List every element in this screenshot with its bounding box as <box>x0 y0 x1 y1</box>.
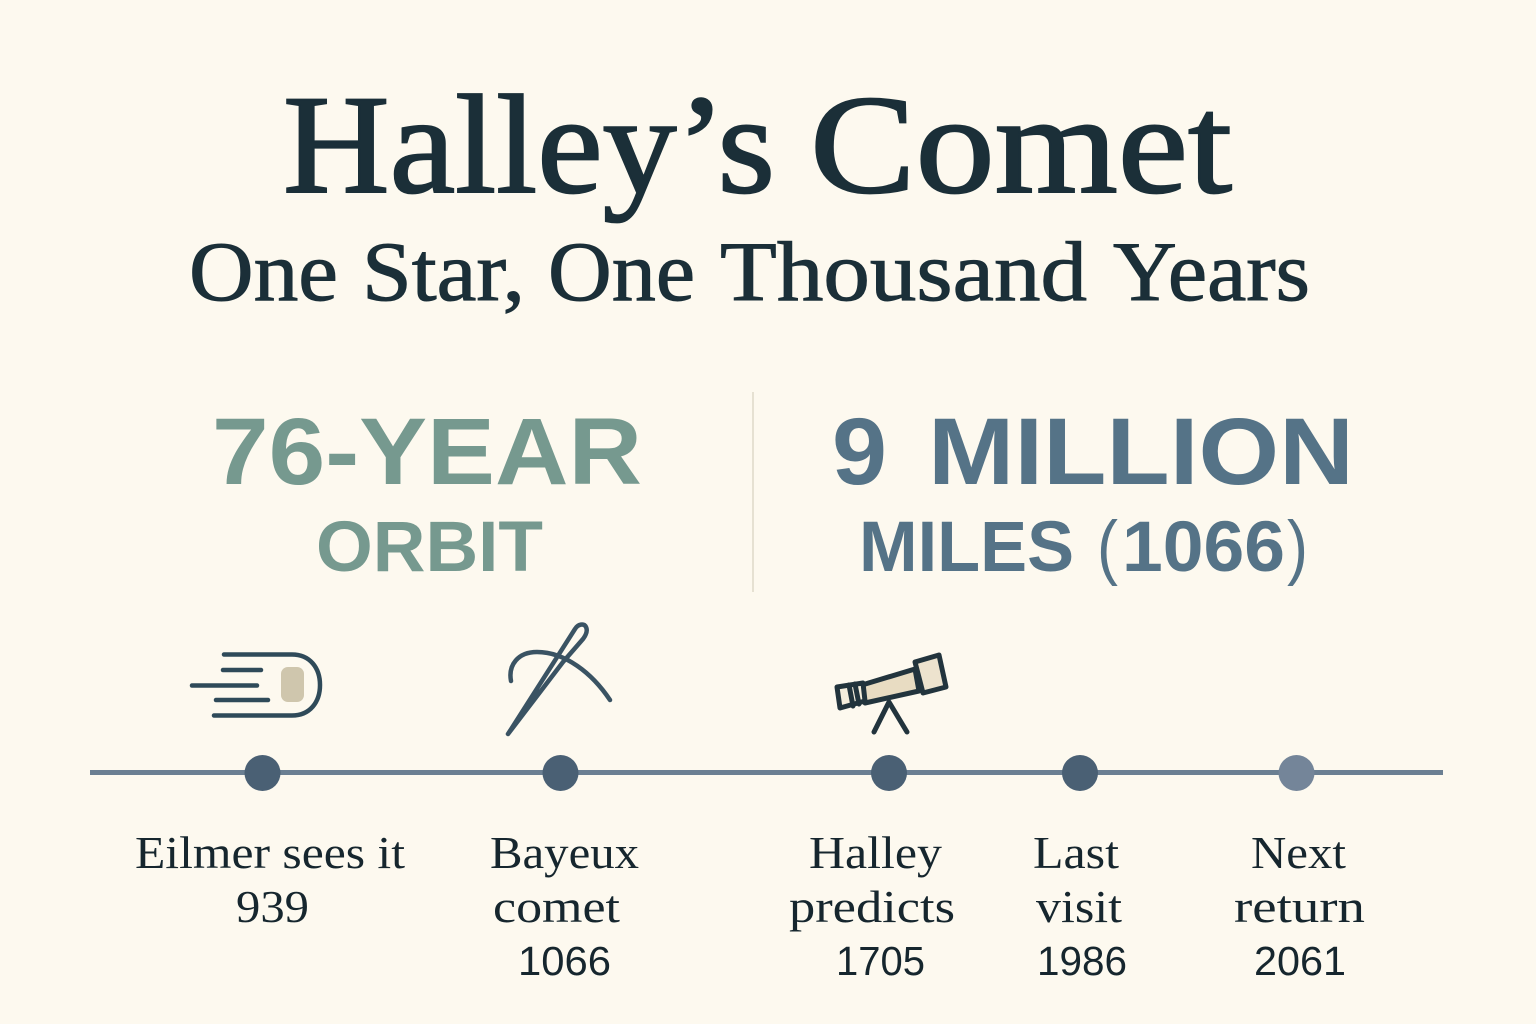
stat: 9 million miles: ( <box>1097 508 1118 587</box>
label: Bayeux comet 1066: Bayeux <box>490 827 639 878</box>
stat: 76-year orbit <box>212 399 642 587</box>
label: Next return 2061: return <box>1234 881 1365 932</box>
icon: telescope <box>837 655 946 732</box>
title: Halley’s <box>283 67 775 223</box>
label: Bayeux comet 1066 <box>490 827 639 984</box>
label: Next return 2061 <box>1234 827 1365 984</box>
label: Bayeux comet 1066: comet <box>493 881 620 932</box>
marker: 1986 <box>1062 755 1098 791</box>
icon: comet <box>192 654 320 716</box>
subtitle: Thousand <box>720 225 1087 319</box>
subtitle: One <box>548 225 695 319</box>
label: Halley predicts 1705: 1705 <box>836 938 925 984</box>
stat: 9 million miles: MILLION <box>928 399 1354 505</box>
marker: 1066 <box>542 755 578 791</box>
marker: 1705 <box>871 755 907 791</box>
title: Comet <box>810 67 1232 223</box>
subtitle: One <box>189 225 338 319</box>
divider <box>752 392 754 592</box>
title <box>283 67 1232 223</box>
stat: 9 million miles: 1066 <box>1122 508 1285 587</box>
label: Next return 2061: 2061 <box>1254 938 1346 984</box>
subtitle: Star, <box>362 225 525 319</box>
stat: 76-year orbit: ORBIT <box>316 508 543 587</box>
stat: 76-year orbit: 76-YEAR <box>212 399 642 505</box>
label: Halley predicts 1705 <box>789 827 955 984</box>
label: Next return 2061: Next <box>1251 827 1346 878</box>
label: Eilmer sees it 939: 939 <box>236 881 309 932</box>
stat: 9 million miles <box>832 399 1354 587</box>
subtitle <box>189 225 1310 319</box>
label: Eilmer sees it 939: Eilmer sees it <box>135 827 405 878</box>
stat: 9 million miles: ) <box>1287 508 1308 587</box>
stat: 9 million miles: 9 <box>832 399 887 505</box>
icon: needle and thread <box>508 625 610 734</box>
marker: 939 <box>244 755 280 791</box>
label: Halley predicts 1705: predicts <box>789 881 955 932</box>
timeline <box>90 755 1443 791</box>
label: Last visit 1986: Last <box>1033 827 1119 878</box>
label: Last visit 1986 <box>1033 827 1127 984</box>
marker: 2061 <box>1278 755 1314 791</box>
label: Bayeux comet 1066: 1066 <box>518 938 611 984</box>
label: Last visit 1986: visit <box>1036 881 1122 932</box>
label: Last visit 1986: 1986 <box>1037 938 1127 984</box>
subtitle: Years <box>1113 225 1310 319</box>
label: Eilmer sees it 939 <box>135 827 405 932</box>
stat: 9 million miles: MILES <box>859 508 1074 587</box>
label: Halley predicts 1705: Halley <box>809 827 942 878</box>
